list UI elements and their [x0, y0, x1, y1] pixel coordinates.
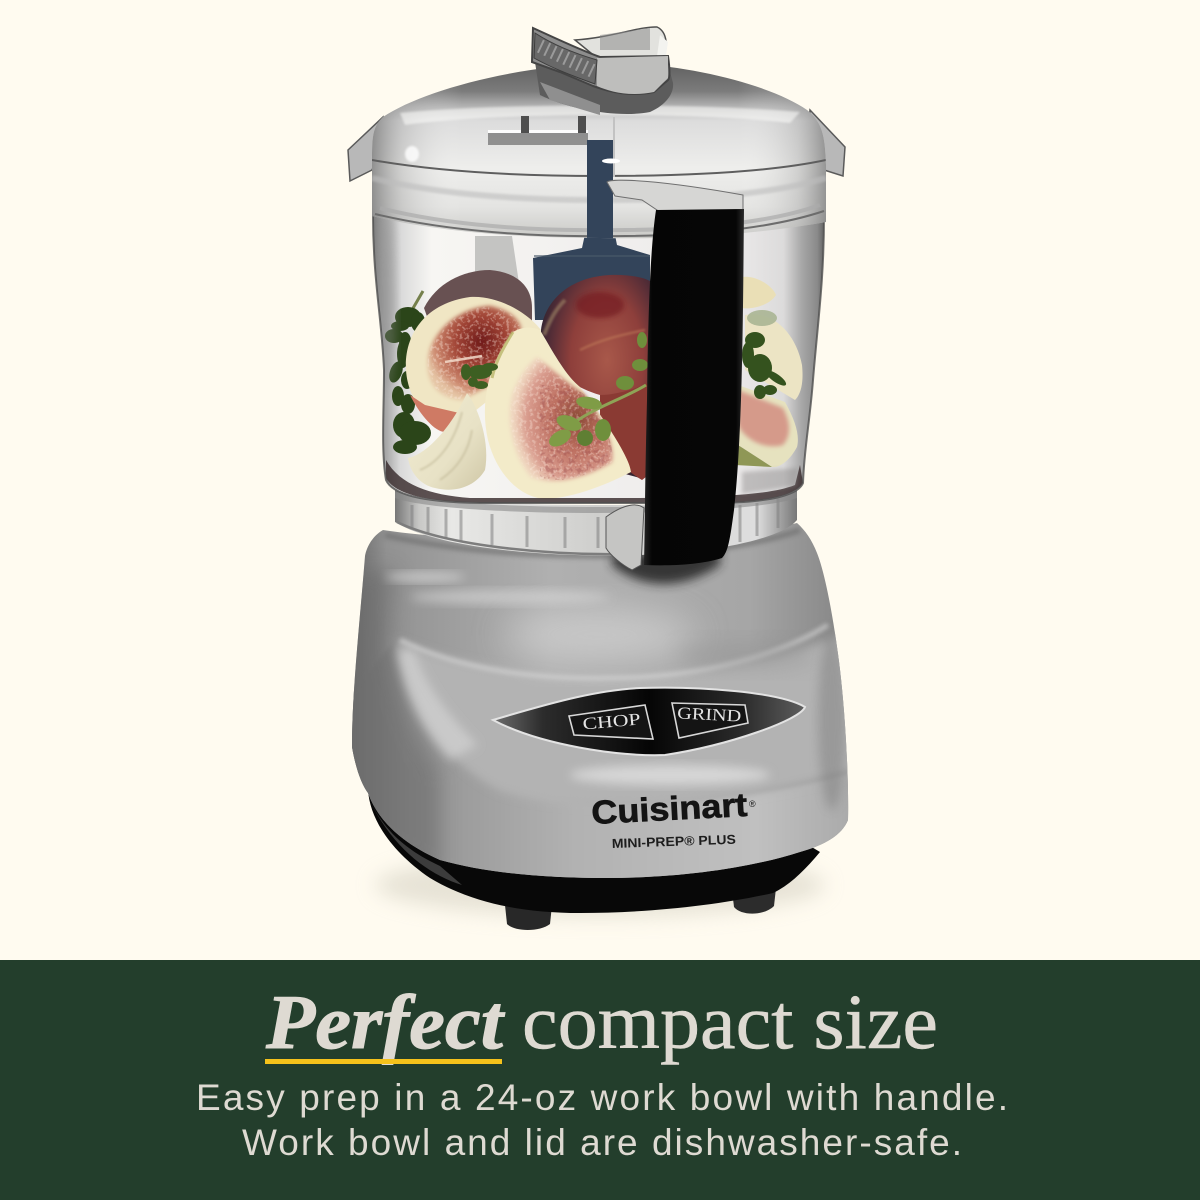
description text: Easy prep in a 24-oz work bowl with handle.: [196, 1077, 1008, 1118]
lid feed chute: [532, 27, 673, 115]
yellow underline: [265, 1059, 502, 1064]
bowl collar: [395, 490, 797, 556]
handle: [606, 180, 744, 570]
headline: Perfect: [265, 979, 506, 1065]
description text: [196, 1077, 1008, 1163]
product photo: food processor: [345, 27, 860, 930]
fig: back dark fig: [424, 270, 532, 320]
brand logo: ®: [749, 799, 756, 809]
headline: [265, 978, 938, 1065]
background: [0, 0, 1200, 960]
lid: [348, 27, 845, 240]
herb sprig: center large: [546, 332, 648, 450]
herb sprig: right: [742, 310, 788, 399]
blade paddle: [533, 238, 650, 320]
brand logo: MINI-PREP® PLUS: [612, 832, 736, 851]
fig: center half: [485, 328, 631, 499]
button: grind: [672, 703, 748, 738]
metal motor base: [345, 523, 860, 890]
description text: Work bowl and lid are dishwasher-safe.: [242, 1122, 962, 1163]
clear work bowl: [373, 210, 824, 503]
center spindle: [475, 236, 518, 280]
brand logo: Cuisinart: [590, 786, 748, 831]
caption band: [0, 960, 1200, 1200]
feet: [505, 888, 776, 930]
fig: left half: [406, 297, 541, 432]
black underside of base: [368, 790, 820, 913]
floor shadow: [375, 853, 825, 917]
right side fruit: [735, 277, 803, 467]
button: chop: CHOP: [582, 710, 641, 734]
button: chop: [569, 705, 653, 739]
herb sprig: left: [385, 291, 431, 454]
button: grind: GRIND: [677, 703, 742, 726]
herb sprig: center small: [461, 363, 498, 389]
bowl floor reflection: [386, 460, 803, 503]
headline: compact size: [522, 978, 938, 1065]
control panel: chop and grind: [493, 688, 805, 755]
brand logo: [590, 786, 756, 851]
garlic clove: [408, 393, 486, 490]
fig: whole red fig: [541, 275, 655, 480]
